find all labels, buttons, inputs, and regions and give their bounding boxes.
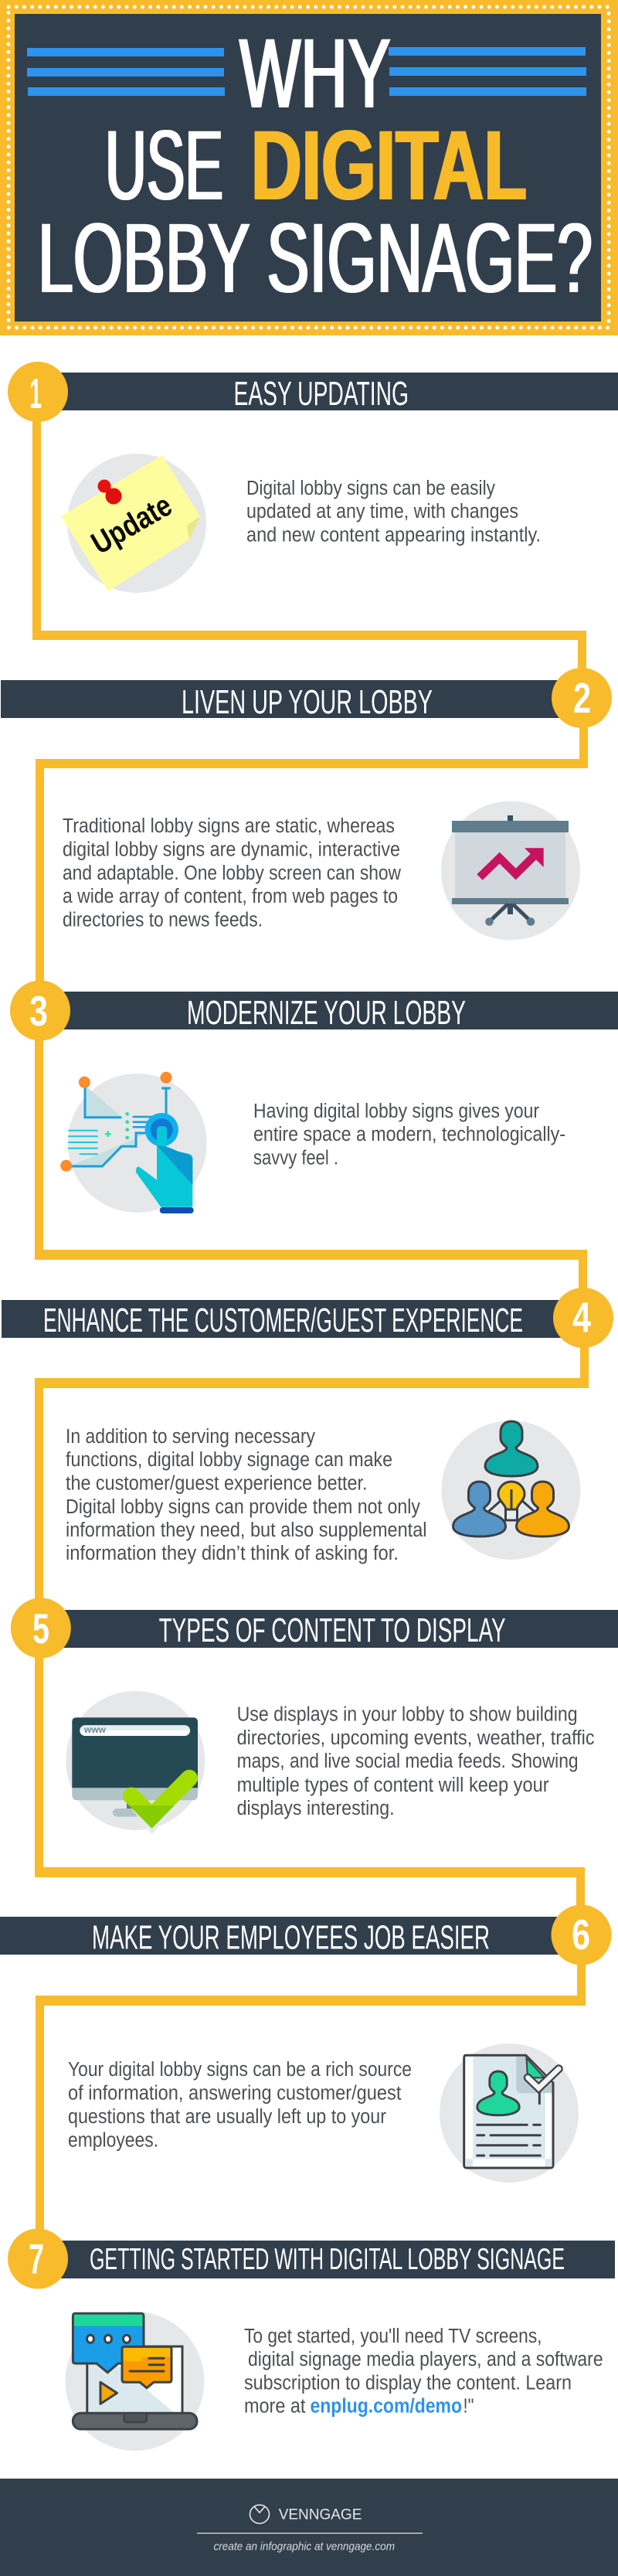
link text: enplug.com/demo — [311, 2396, 462, 2418]
number badge 5: 5 — [32, 1604, 49, 1652]
section 2: liven up your lobby — [1, 668, 612, 940]
left blue stripes — [27, 48, 225, 96]
connector 3 to 4 — [35, 1036, 587, 1292]
number badge 4: 4 — [572, 1293, 591, 1341]
icon: laptop with chat bubbles — [65, 2312, 204, 2451]
header panel — [0, 0, 618, 335]
text block 5: multiple types of content will keep your — [237, 1775, 549, 1796]
text block 5: maps, and live social media feeds. Showing — [237, 1751, 579, 1772]
text block 6: employees. — [68, 2130, 158, 2152]
number badge 3: 3 — [29, 987, 48, 1035]
icon: sticky note update — [61, 454, 206, 593]
heading bar 5 — [63, 1610, 618, 1648]
right blue stripes — [389, 47, 586, 96]
text block 2: Traditional lobby signs are static, whereas — [63, 815, 395, 837]
text block 1: Digital lobby signs can be easily — [246, 478, 495, 499]
heading bar 6 — [0, 1917, 559, 1955]
connector 2 to 3 — [36, 727, 588, 985]
text block 6 — [68, 2059, 412, 2152]
number badge 5 — [11, 1598, 71, 1659]
heading bar 7 — [60, 2241, 615, 2278]
text block 4: the customer/guest experience better. — [66, 1473, 368, 1495]
text block 5: Use displays in your lobby to show building — [237, 1704, 578, 1726]
text block 5: displays interesting. — [237, 1798, 395, 1819]
icon: presentation screen with rising arrow — [441, 801, 580, 940]
section 4: enhance the customer experience — [2, 1288, 613, 1564]
text block 7: To get started, you'll need TV screens, — [244, 2326, 542, 2347]
connector 4 to 5 — [35, 1345, 589, 1601]
icon: monitor with check mark: www — [83, 1724, 107, 1735]
icon: profile document with check — [440, 2043, 579, 2183]
number badge 6 — [552, 1904, 612, 1965]
text block 7: more at — [244, 2396, 305, 2418]
heading 2: LIVEN UP YOUR LOBBY — [182, 684, 433, 721]
text block 4: In addition to serving necessary — [66, 1426, 315, 1448]
text block 7: subscription to display the content. Learn — [244, 2373, 572, 2394]
title: USE — [105, 111, 223, 221]
number badge 1 — [8, 362, 68, 422]
number badge 7: 7 — [29, 2235, 44, 2283]
number badge 2: 2 — [573, 674, 591, 722]
icon: touch interface hand — [60, 1072, 207, 1213]
connector 6 to 7 — [36, 1962, 586, 2234]
icon: monitor with check mark — [66, 1691, 205, 1834]
text block 1 — [246, 478, 541, 546]
heading bar 1 — [60, 373, 618, 410]
text block 4: functions, digital lobby signage can make — [66, 1449, 392, 1471]
heading 3: MODERNIZE YOUR LOBBY — [187, 995, 466, 1032]
number badge 7 — [8, 2229, 68, 2289]
text block 6: of information, answering customer/guest — [68, 2083, 401, 2105]
text block 4: information they didn’t think of asking for. — [66, 1543, 399, 1564]
header yellow frame — [0, 0, 618, 335]
section 7: getting started — [8, 2229, 615, 2451]
footer background — [0, 2479, 618, 2576]
text block 4: Digital lobby signs can provide them not only — [66, 1496, 420, 1518]
heading bar 2 — [1, 680, 562, 718]
text block 2: and adaptable. One lobby screen can show — [63, 863, 402, 884]
icon: venngage logo — [250, 2505, 269, 2523]
text block 2 — [63, 815, 402, 931]
number badge 2 — [552, 668, 612, 728]
section 1: easy updating — [8, 362, 618, 593]
text block 5: directories, upcoming events, weather, traffic — [237, 1727, 595, 1749]
text block 3: entire space a modern, technologically- — [253, 1124, 565, 1145]
brand name: VENNGAGE — [279, 2506, 362, 2523]
text block 3: Having digital lobby signs gives your — [253, 1101, 539, 1122]
title: WHY — [239, 19, 391, 129]
heading bar 4 — [2, 1300, 562, 1338]
text block 2: directories to news feeds. — [63, 909, 263, 931]
heading 1: EASY UPDATING — [233, 376, 409, 413]
text block 4 — [66, 1426, 426, 1564]
text block 7: !" — [464, 2396, 474, 2418]
text block 1: updated at any time, with changes — [246, 501, 518, 522]
text block 3: savvy feel . — [253, 1147, 338, 1169]
text block 1: and new content appearing instantly. — [246, 524, 541, 546]
section 3: modernize your lobby — [10, 980, 618, 1213]
connector 5 to 6 — [35, 1654, 585, 1909]
heading bar 3 — [63, 992, 618, 1029]
icon: people and light bulb — [441, 1421, 580, 1560]
number badge 6: 6 — [572, 1911, 590, 1958]
connector 1 to 2 — [32, 417, 586, 672]
section 5: types of content — [11, 1598, 618, 1834]
title — [38, 19, 593, 314]
text block 2: digital lobby signs are dynamic, interactive — [63, 839, 400, 861]
section 6: make your employees job easier — [0, 1904, 612, 2183]
number badge 4 — [553, 1288, 613, 1348]
number badge 3 — [10, 980, 70, 1040]
footer — [0, 2479, 618, 2576]
text block 5 — [237, 1704, 595, 1819]
text block 7 — [244, 2326, 603, 2418]
header dark background — [15, 14, 601, 322]
footer tagline: create an infographic at venngage.com — [213, 2540, 395, 2554]
text block 6: questions that are usually left up to your — [68, 2106, 386, 2128]
number badge 1: 1 — [29, 369, 42, 417]
text block 2: a wide array of content, from web pages to — [63, 886, 398, 907]
dotted white border — [8, 7, 609, 328]
icon: sticky note update: Update — [86, 488, 178, 561]
text block 6: Your digital lobby signs can be a rich source — [68, 2059, 412, 2081]
text block 4: information they need, but also supplemental — [66, 1519, 426, 1541]
text block 3 — [253, 1101, 565, 1169]
